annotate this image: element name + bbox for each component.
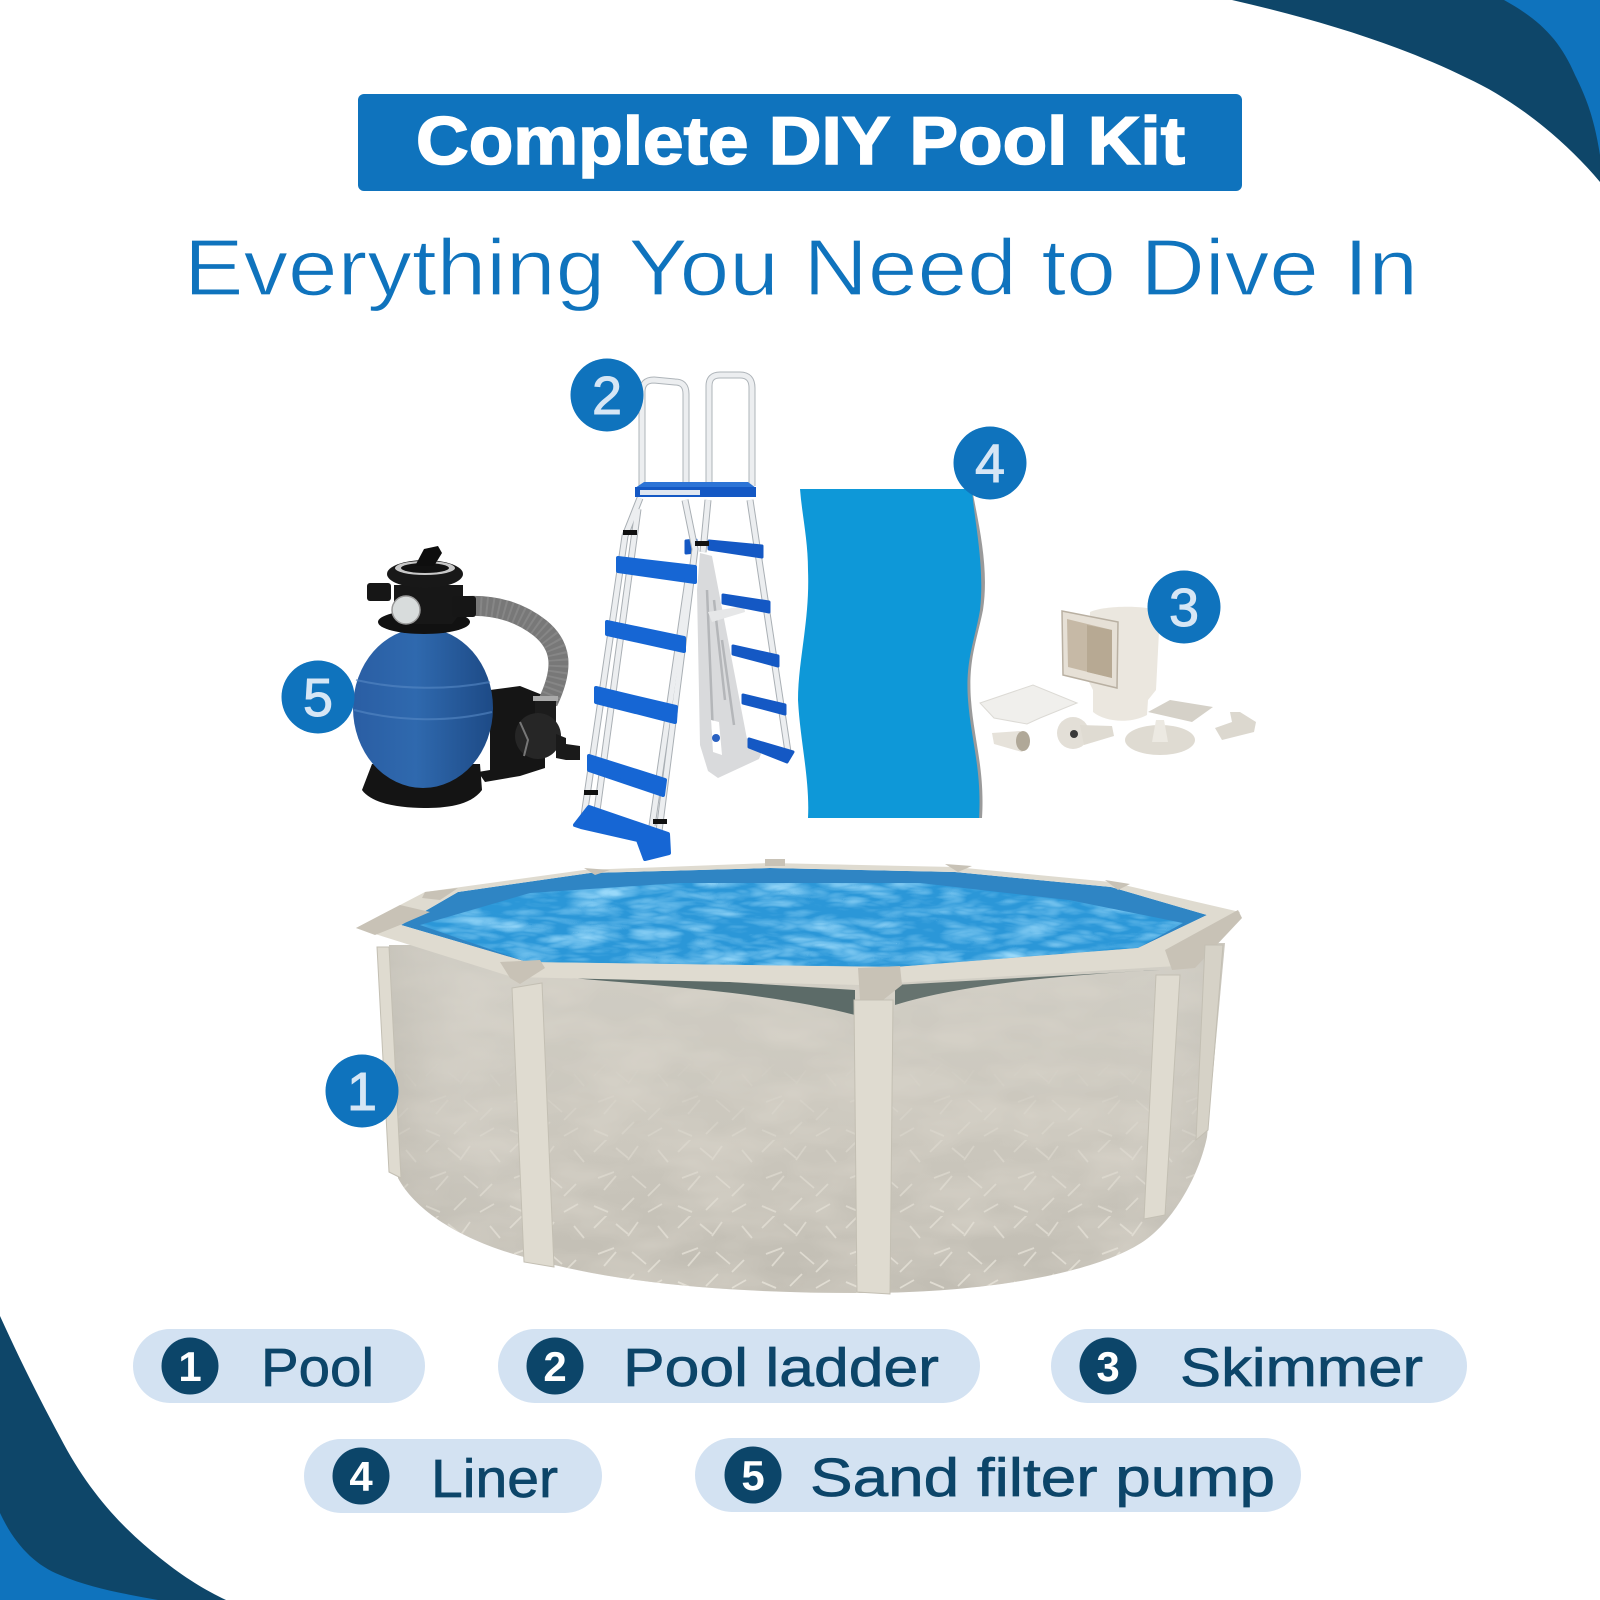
- gauge: [392, 596, 420, 624]
- valve collar: [378, 610, 470, 634]
- lid: [1148, 700, 1213, 722]
- legend pill: Sand filter pump: Sand filter pump: [810, 1448, 1275, 1508]
- badge 5: 5: [303, 668, 333, 728]
- opening: [1067, 619, 1112, 678]
- elbow: [1215, 712, 1256, 740]
- badge 3: [1148, 570, 1220, 644]
- platform: [635, 482, 756, 497]
- liner: [798, 489, 985, 818]
- legend pill: Pool ladder: [498, 1329, 980, 1403]
- legend pill: Liner: [304, 1439, 602, 1513]
- hand rails: [642, 375, 752, 486]
- uprights: [377, 945, 1223, 1294]
- far wall liner: [401, 868, 1207, 967]
- return fitting: [1057, 717, 1089, 749]
- legend pill: Skimmer: 3: [1096, 1343, 1120, 1390]
- top rim: [356, 863, 1240, 985]
- legend pill: Pool: 1: [178, 1343, 202, 1390]
- tank: [353, 628, 493, 788]
- tank base: [362, 764, 482, 808]
- above-ground pool: [356, 859, 1242, 1300]
- badge 1: [326, 1054, 398, 1128]
- skimmer body: [1088, 607, 1160, 721]
- title banner: Complete DIY Pool Kit: [416, 103, 1185, 179]
- legend pill: Pool ladder: Pool ladder: [623, 1338, 939, 1398]
- badge 2: [570, 358, 644, 432]
- badge 4: 4: [975, 434, 1005, 494]
- legend pill: Pool ladder: 2: [543, 1343, 567, 1390]
- decorative corner: top right: [1232, 0, 1600, 182]
- rear steps: [686, 540, 793, 762]
- front rails: [583, 498, 695, 847]
- valve neck: [394, 585, 463, 624]
- outlet: [556, 734, 580, 760]
- skimmer: [980, 607, 1256, 755]
- pump motor: [478, 686, 545, 782]
- hose adapter: [992, 731, 1030, 752]
- legend pill: Skimmer: Skimmer: [1180, 1338, 1423, 1398]
- valve head: [387, 560, 463, 588]
- disc: [1125, 725, 1195, 755]
- legend pill: Pool: [133, 1329, 425, 1403]
- volute: [515, 713, 561, 759]
- safety gate: [697, 553, 763, 778]
- badge 1: 1: [347, 1062, 377, 1122]
- badge 5: [282, 660, 354, 734]
- legend pill: Sand filter pump: 5: [741, 1452, 765, 1499]
- decorative corner: bottom left: [0, 1316, 226, 1600]
- badge 2: 2: [592, 366, 622, 426]
- pool ladder: [575, 375, 793, 859]
- legend pill: Liner: Liner: [431, 1449, 558, 1509]
- title banner: [358, 94, 1242, 191]
- legend pill: Skimmer: [1051, 1329, 1467, 1403]
- pool wall: [389, 943, 1225, 1293]
- corner caps: [356, 859, 1242, 1004]
- ports: [367, 583, 391, 601]
- badge 3: 3: [1169, 578, 1199, 638]
- legend pill: Liner: 4: [349, 1453, 373, 1500]
- hose: [468, 606, 558, 702]
- subtitle: Everything You Need to Dive In: [184, 223, 1418, 312]
- legend pill: Pool: Pool: [261, 1338, 374, 1398]
- plates: [980, 685, 1077, 724]
- rear rails: [703, 500, 788, 752]
- badge 4: [954, 426, 1026, 500]
- union pipe: [535, 698, 556, 724]
- flange: [1062, 611, 1118, 688]
- water: [420, 883, 1183, 967]
- sand filter pump: [353, 546, 580, 808]
- legend pill: Sand filter pump: [695, 1438, 1301, 1512]
- front steps: [575, 558, 695, 859]
